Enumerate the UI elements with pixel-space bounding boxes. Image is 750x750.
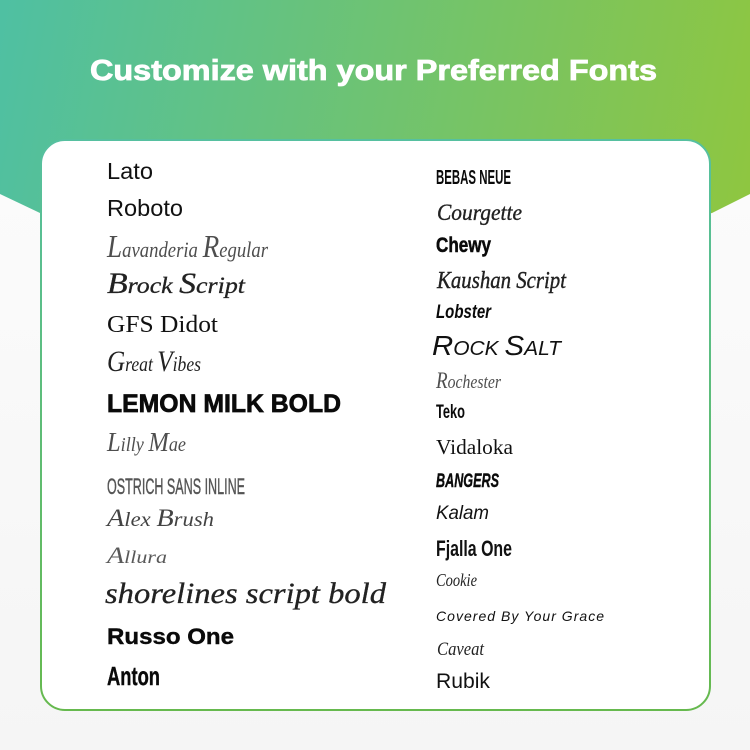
font name: Kalam: Kalam [436, 503, 489, 524]
font name: Fjalla One: Fjalla One [436, 536, 512, 561]
font name: Lilly Mae: Lilly Mae [106, 427, 186, 457]
font name: Kaushan Script: Kaushan Script [436, 268, 567, 294]
green gradient header [0, 0, 750, 252]
font name: Courgette: Courgette [437, 200, 522, 225]
left font column [105, 158, 387, 691]
font name: Brock Script: Brock Script [107, 267, 246, 300]
font name: Russo One: Russo One [107, 624, 234, 649]
font name: Rubik: Rubik [436, 670, 490, 693]
font name: Rock Salt: ROCK SALT [432, 330, 563, 361]
font name: Covered By Your Grace: Covered By Your Grace [436, 608, 604, 624]
font name: Roboto: Roboto [107, 195, 183, 221]
font name: Cookie: Cookie [436, 570, 477, 590]
font name: Shorelines Script Bold: shorelines script bold [105, 577, 387, 610]
font name: Rochester: Rochester [435, 368, 501, 393]
font name: Great Vibes: Great Vibes [107, 345, 201, 378]
right font column [432, 167, 604, 693]
font name: Vidaloka: Vidaloka [436, 435, 514, 459]
font name: Chewy: Chewy [436, 234, 491, 257]
panel: font list card [41, 140, 710, 710]
font name: Teko: Teko [436, 402, 465, 423]
font name: Lato: Lato [107, 158, 153, 184]
font name: Lobster: Lobster [436, 302, 492, 323]
font name: Bangers: BANGERS [436, 471, 499, 492]
font name: Anton: Anton [107, 661, 160, 691]
font name: Ostrich Sans Inline: OSTRICH SANS INLINE [107, 474, 245, 499]
font name: Caveat: Caveat [437, 639, 485, 660]
font name: Lavanderia Regular: Lavanderia Regular [106, 228, 268, 264]
font name: Bebas Neue: BEBAS NEUE [436, 167, 511, 189]
title: Customize with your Preferred Fonts [90, 55, 657, 87]
font name: Lemon Milk Bold: LEMON MILK BOLD [107, 390, 341, 418]
font name: Allura: Allura [105, 543, 167, 568]
font name: Alex Brush: Alex Brush [105, 505, 214, 532]
font name: GFS Didot: GFS Didot [107, 312, 218, 338]
